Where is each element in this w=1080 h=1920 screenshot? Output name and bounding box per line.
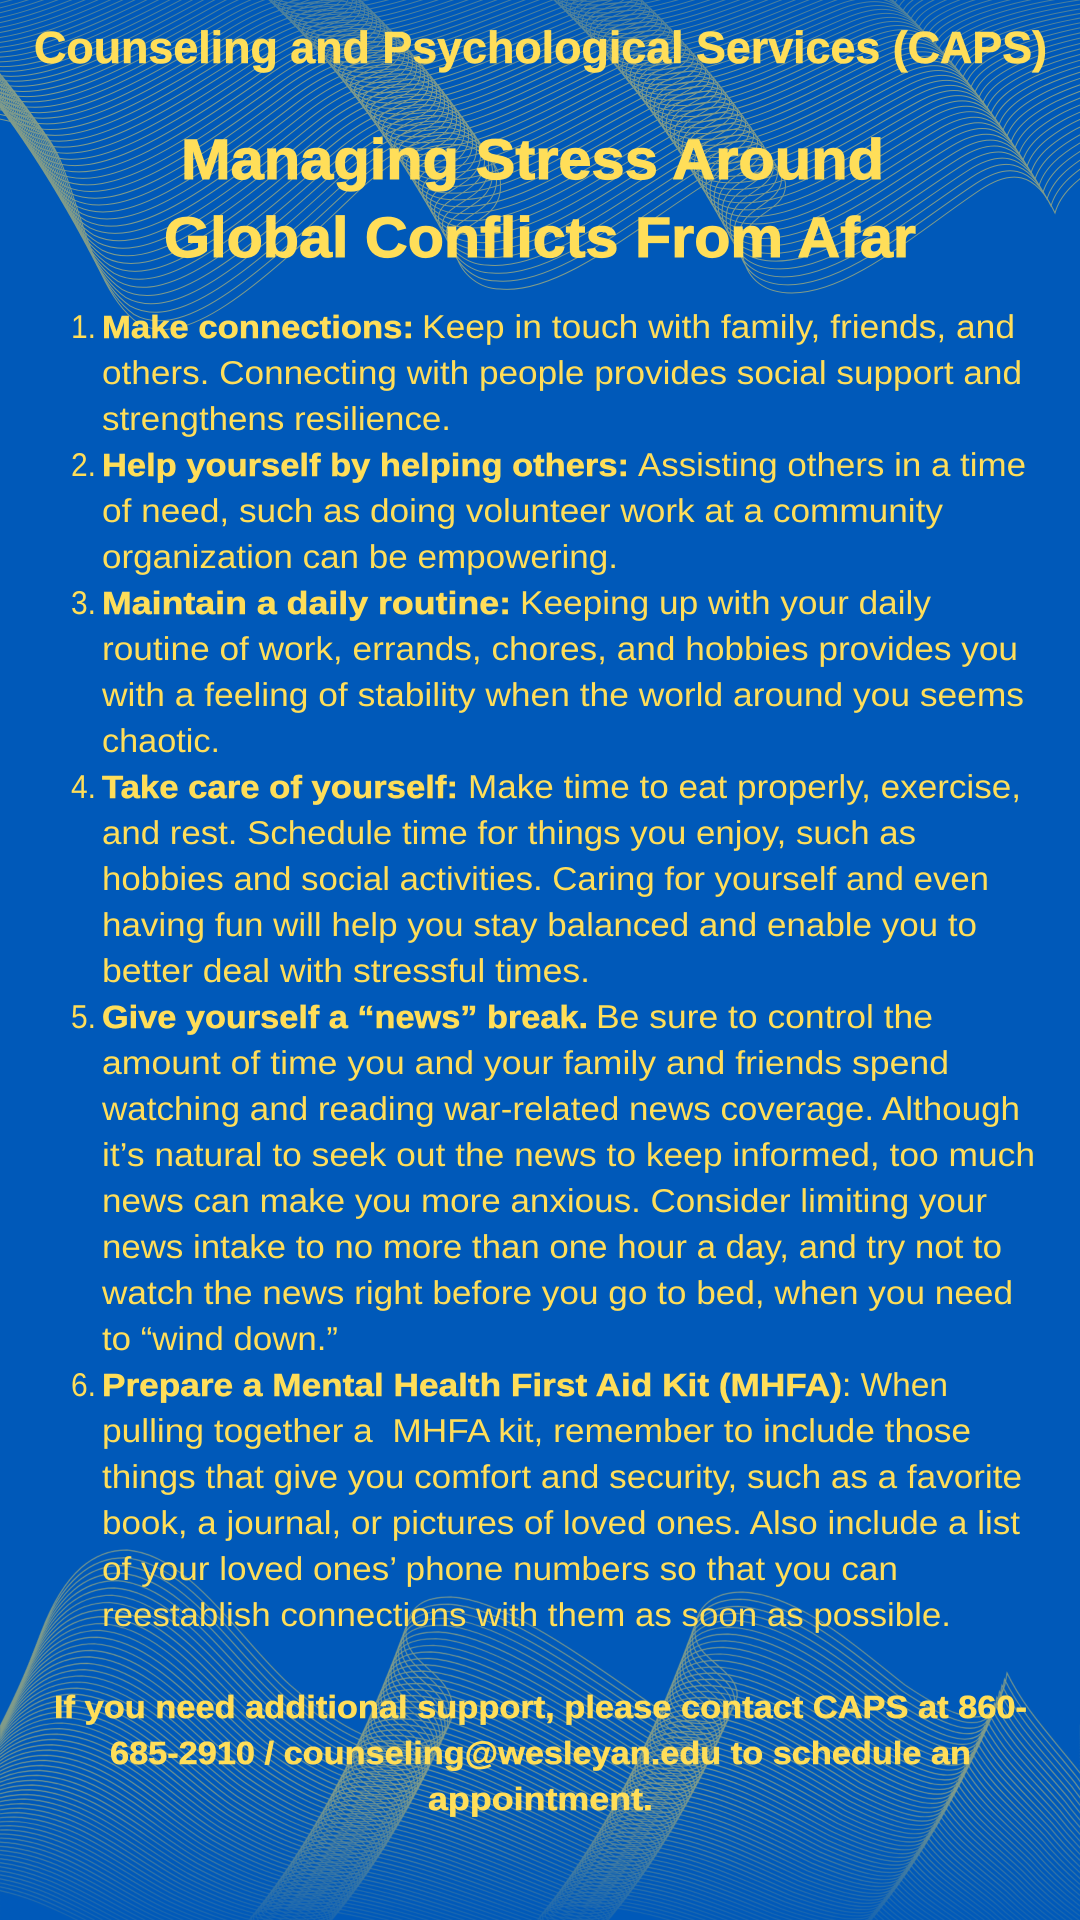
tip 4: take care of yourself <box>71 768 1021 989</box>
tip 3: daily routine: Maintain a daily routine: <box>102 585 511 621</box>
tip 4: take care of yourself: Make time to eat properly, exercise, <box>468 768 1021 805</box>
tip 6: mental health first aid kit: reestablish connections with them as soon as possible. <box>102 1596 951 1633</box>
tip 2: help others: of need, such as doing volunteer work at a community <box>102 492 944 529</box>
bottom wave ribbon <box>0 1549 1080 1920</box>
footer: contact callout: If you need additional support, please contact CAPS at 860- <box>54 1689 1027 1725</box>
header: organisation name: Counseling and Psychological Services (CAPS) <box>34 22 1047 73</box>
tip 5: news break: news intake to no more than one hour a day, and try not to <box>102 1228 1002 1265</box>
tip 5: news break: watching and reading war-related news coverage. Although <box>101 1090 1020 1127</box>
tip 5: news break: news can make you more anxious. Consider limiting your <box>102 1182 987 1219</box>
tip 4: take care of yourself: 4. <box>71 768 96 805</box>
tip 5: news break: Be sure to control the <box>596 998 933 1035</box>
tip 6: mental health first aid kit: 6. <box>71 1366 96 1403</box>
tip 3: daily routine: with a feeling of stability when the world around you seems <box>101 676 1024 713</box>
tip 4: take care of yourself: and rest. Schedule time for things you enjoy, such as <box>102 814 916 851</box>
numbered list of coping tips <box>71 308 1035 1633</box>
tip 4: take care of yourself: Take care of yourself: <box>102 769 458 805</box>
tip 2: help others: Help yourself by helping others: <box>102 447 629 483</box>
tip 1: make connections: Make connections: <box>102 309 414 345</box>
tip 6: mental health first aid kit: book, a journal, or pictures of loved ones. Also include a list <box>102 1504 1020 1541</box>
tip 3: daily routine: 3. <box>71 584 96 621</box>
title: Global Conflicts From Afar <box>164 206 916 270</box>
title <box>164 128 916 270</box>
tip 6: mental health first aid kit: Prepare a Mental Health First Aid Kit (MHFA) <box>102 1367 842 1403</box>
tip 2: help others: Assisting others in a time <box>638 446 1026 483</box>
tip 2: help others: organization can be empowering. <box>102 538 618 575</box>
tip 1: make connections: Keep in touch with family, friends, and <box>422 308 1015 345</box>
tip 4: take care of yourself: hobbies and social activities. Caring for yourself and even <box>102 860 989 897</box>
top wave ribbon <box>0 0 1080 330</box>
tip 5: news break: 5. <box>71 998 96 1035</box>
footer: contact callout: appointment. <box>428 1781 653 1817</box>
tip 5: news break: it’s natural to seek out the news to keep informed, too much <box>102 1136 1035 1173</box>
tip 5: news break: watch the news right before you go to bed, when you need <box>101 1274 1013 1311</box>
tip 2: help others <box>71 446 1026 575</box>
footer: contact callout: 685-2910 / counseling@wesleyan.edu to schedule an <box>110 1735 971 1771</box>
tip 3: daily routine: chaotic. <box>102 722 220 759</box>
tip 6: mental health first aid kit: of your loved ones’ phone numbers so that you can <box>102 1550 898 1587</box>
tip 5: news break <box>71 998 1035 1357</box>
title: Managing Stress Around <box>181 128 884 192</box>
tip 3: daily routine: Keeping up with your daily <box>520 584 932 621</box>
tip 4: take care of yourself: better deal with stressful times. <box>102 952 590 989</box>
tip 1: make connections: others. Connecting with people provides social support and <box>102 354 1022 391</box>
footer: contact callout <box>54 1689 1027 1817</box>
tip 6: mental health first aid kit <box>71 1366 1022 1633</box>
tip 5: news break: amount of time you and your family and friends spend <box>102 1044 949 1081</box>
tip 6: mental health first aid kit: pulling together a MHFA kit, remember to include those <box>102 1412 971 1449</box>
tip 5: news break: to “wind down.” <box>102 1320 338 1357</box>
tip 6: mental health first aid kit: things that give you comfort and security, such as a favorite <box>102 1458 1022 1495</box>
tip 1: make connections: strengthens resilience. <box>102 400 451 437</box>
tip 4: take care of yourself: having fun will help you stay balanced and enable you to <box>102 906 977 943</box>
tip 2: help others: 2. <box>71 446 96 483</box>
tip 1: make connections <box>71 308 1022 437</box>
tip 6: mental health first aid kit: : When <box>842 1366 948 1403</box>
tip 3: daily routine: routine of work, errands, chores, and hobbies provides you <box>102 630 1018 667</box>
tip 5: news break: Give yourself a “news” break. <box>102 999 588 1035</box>
tip 3: daily routine <box>71 584 1024 759</box>
tip 1: make connections: 1. <box>71 308 96 345</box>
